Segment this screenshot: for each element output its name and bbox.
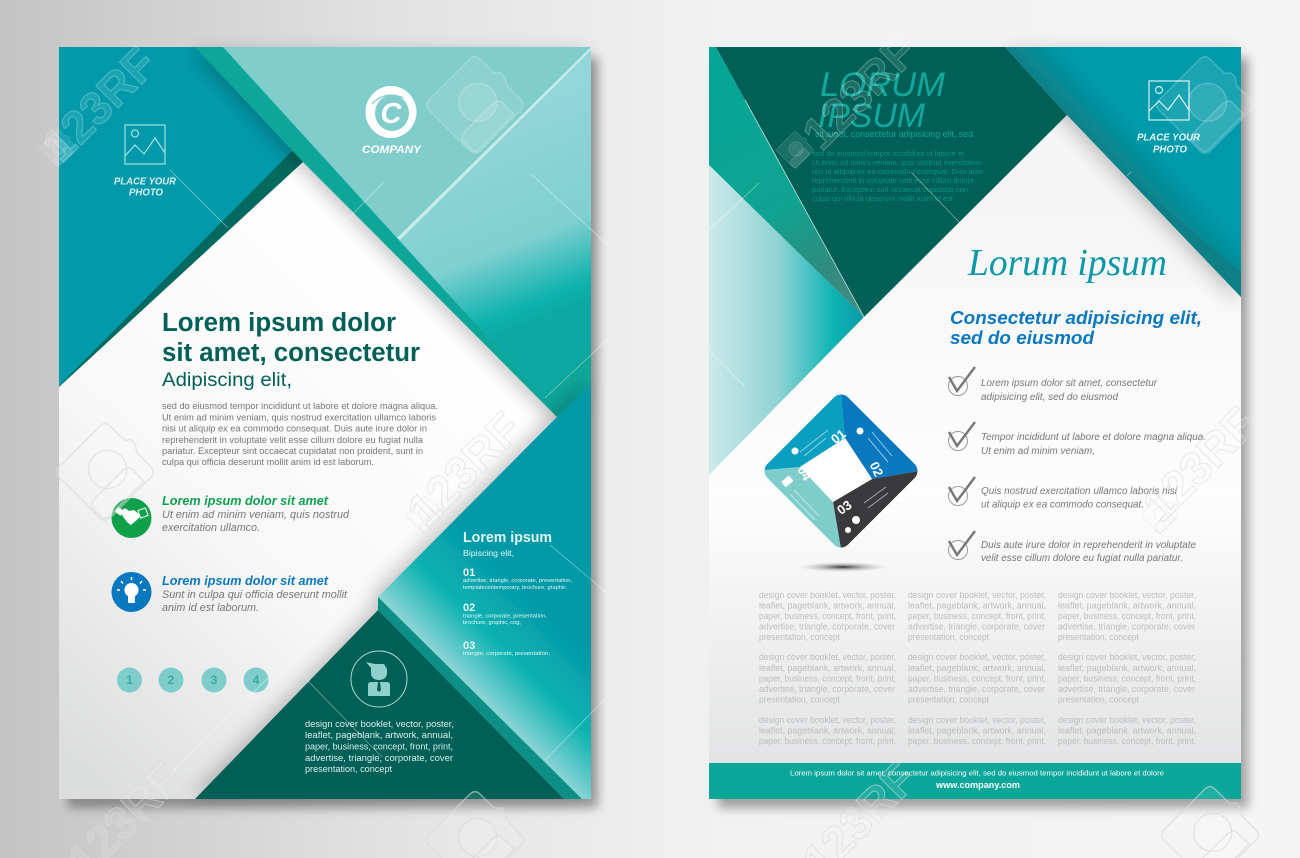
body paragraph: pariatur. Excepteur sint occaecat cupidatat non proident, sunt in — [162, 446, 423, 457]
watermark wordmarks: 123RF — [792, 25, 926, 159]
list panel text: brochure, graphic, cog, — [463, 620, 521, 626]
check item 4 — [948, 531, 1197, 564]
page number dots: 3 — [211, 673, 218, 687]
column 2: paper, business, concept, front, print, — [908, 736, 1046, 746]
list panel text: 03 — [463, 640, 475, 652]
cover paragraph: Ut enim ad minim veniam, quis nostrud exercitation — [812, 158, 982, 167]
photo caption — [1137, 132, 1200, 156]
list panel text: triangle, corporate, presentation, — [463, 651, 550, 657]
dark strip under teal panel — [59, 150, 303, 387]
column 1: presentation, concept — [759, 694, 840, 704]
cover paragraph: pariatur. Excepteur sint occaecat cupidatat non — [812, 185, 968, 194]
list panel text — [463, 530, 572, 657]
column 1: design cover booklet, vector, poster, — [759, 590, 896, 600]
dark panel text: design cover booklet, vector, poster, — [305, 719, 454, 729]
check item 2 — [948, 422, 1206, 457]
footer band — [709, 763, 1241, 799]
body paragraph: nisi ut aliquip ex ea commodo consequat. Duis aute irure dolor in — [162, 424, 427, 434]
cover title: LORUM — [820, 66, 945, 104]
footer band: Lorem ipsum dolor sit amet, consectetur adipisicing elit, sed do eiusmod tempor incididunt ut labore et dolore — [790, 768, 1164, 778]
column 3: advertise, triangle, corporate, cover — [1058, 622, 1195, 632]
item: partnership: exercitation ullamco. — [162, 522, 260, 534]
column 2: presentation, concept — [908, 632, 989, 642]
body paragraph: sed do eiusmod tempor incididunt ut labore et dolore magna aliqua. — [162, 401, 438, 412]
column 2: advertise, triangle, corporate, cover — [908, 684, 1045, 694]
cover title — [818, 66, 945, 135]
diagram shadow — [799, 562, 887, 572]
check item 1: Lorem ipsum dolor sit amet, consectetur — [981, 378, 1158, 389]
chart: diamond cycle diagram: 01 — [828, 426, 849, 447]
column 1: leaflet, pageblank, artwork, annual, — [759, 663, 896, 673]
column 3: presentation, concept — [1058, 694, 1139, 704]
column 1: advertise, triangle, corporate, cover — [759, 622, 895, 632]
logo: company — [362, 86, 423, 156]
right lower panel with list — [195, 383, 591, 799]
top left teal panel — [59, 47, 303, 386]
script title: Lorum ipsum — [967, 242, 1167, 284]
heading: Lorem ipsum dolor — [162, 309, 396, 337]
icon: place your photo — [1149, 81, 1189, 120]
check item 3 — [948, 477, 1178, 510]
column 2: presentation, concept — [908, 694, 989, 704]
list panel text: advertise, triangle, corporate, presentation, — [463, 578, 572, 584]
item: idea: Sunt in culpa qui officia deserunt mollit — [162, 589, 348, 601]
photo caption: PHOTO — [129, 188, 163, 198]
chart: diamond cycle diagram: 03 — [834, 497, 855, 518]
right upper panels — [195, 47, 591, 417]
panel: left page — [59, 47, 591, 799]
item: partnership — [162, 493, 350, 534]
column 1: presentation, concept — [759, 632, 840, 642]
column 1: leaflet, pageblank, artwork, annual, — [759, 726, 896, 736]
chart: diamond cycle diagram: 04 — [794, 463, 815, 484]
light left panel — [709, 165, 864, 475]
check item 1 — [948, 367, 1158, 403]
body paragraph: culpa qui officia deserunt mollit anim id est laborum. — [162, 457, 374, 468]
photo caption — [114, 176, 176, 198]
body paragraph — [162, 401, 438, 468]
dark panel text: presentation, concept — [305, 764, 392, 774]
column 3: advertise, triangle, corporate, cover — [1058, 684, 1195, 694]
page number dots: 2 — [168, 673, 175, 687]
list panel text: templatecontemporary, brochure, graphic — [463, 585, 567, 591]
list panel text: 01 — [463, 567, 475, 579]
dark panel text: leaflet, pageblank, artwork, annual, — [305, 730, 453, 740]
photo caption: PLACE YOUR — [1137, 132, 1200, 144]
right page base — [709, 47, 1241, 799]
check item 3: Quis nostrud exercitation ullamco laboris nisi — [981, 486, 1178, 497]
column 3: leaflet, pageblank, artwork, annual, — [1058, 663, 1196, 673]
column 3: leaflet, pageblank, artwork, annual, — [1058, 600, 1196, 610]
column 3: design cover booklet, vector, poster, — [1058, 652, 1196, 662]
column 3: paper, business, concept, front, print, — [1058, 736, 1196, 746]
page number dots — [117, 668, 268, 692]
item: partnership: Ut enim ad minim veniam, quis nostrud — [162, 509, 350, 521]
icon: light bulb — [112, 572, 152, 612]
cover title: IPSUM — [818, 97, 926, 135]
heading — [162, 309, 420, 391]
page number dots: 4 — [253, 673, 260, 687]
item: idea: anim id est laborum. — [162, 602, 259, 614]
column 2 — [908, 590, 1046, 746]
blue heading: Consectetur adipisicing elit, — [950, 307, 1202, 328]
list panel text: Lorem ipsum — [463, 530, 552, 546]
page number dots: 1 — [126, 673, 133, 687]
photo caption: PHOTO — [1153, 144, 1187, 156]
list panel text: Bipiscing elit, — [463, 548, 514, 558]
item: idea — [162, 573, 348, 614]
watermark wordmarks: 123RF — [32, 37, 166, 171]
column 1: design cover booklet, vector, poster, — [759, 652, 896, 662]
column 2: leaflet, pageblank, artwork, annual, — [908, 726, 1046, 736]
footer band: www.company.com — [935, 780, 1020, 791]
logo: company: C — [381, 98, 403, 130]
cover subtitle: sit amet, consectetur adipisicing elit, sed — [815, 129, 973, 139]
column 3: leaflet, pageblank, artwork, annual, — [1058, 726, 1196, 736]
blue heading — [950, 307, 1202, 348]
item: partnership: Lorem ipsum dolor sit amet — [162, 493, 329, 508]
cover paragraph: sed do eiusmod tempor incididunt ut labore et — [812, 149, 965, 158]
column 1: leaflet, pageblank, artwork, annual, — [759, 600, 896, 610]
column 1: advertise, triangle, corporate, cover — [759, 684, 895, 694]
icon: person — [351, 651, 407, 707]
check item 3: ut aliquip ex ea commodo consequat. — [981, 500, 1144, 510]
column 3: design cover booklet, vector, poster, — [1058, 715, 1196, 725]
list panel text: 02 — [463, 602, 475, 614]
column 2: leaflet, pageblank, artwork, annual, — [908, 600, 1046, 610]
dark panel text — [305, 719, 454, 774]
text columns — [759, 590, 1196, 746]
dark panel text: advertise, triangle, corporate, cover — [305, 753, 453, 763]
column 2: leaflet, pageblank, artwork, annual, — [908, 663, 1046, 673]
check item 4: Duis aute irure dolor in reprehenderit in voluptate — [981, 540, 1197, 551]
column 2: design cover booklet, vector, poster, — [908, 652, 1046, 662]
column 3 — [1058, 590, 1196, 746]
column 1: paper, business, concept, front, print, — [759, 611, 896, 621]
body paragraph: Ut enim ad minim veniam, quis nostrud exercitation ullamco laboris — [162, 412, 436, 424]
dark top panel — [716, 47, 1067, 317]
column 3: presentation, concept — [1058, 632, 1139, 642]
heading: sit amet, consectetur — [162, 339, 420, 367]
green left panel — [709, 47, 864, 317]
chart: diamond cycle diagram: 02 — [867, 459, 886, 479]
logo: company: COMPANY — [362, 144, 423, 156]
column 1: design cover booklet, vector, poster, — [759, 715, 896, 725]
chart: diamond cycle diagram — [764, 394, 918, 548]
top right teal panel — [1005, 47, 1241, 297]
list panel text: triangle, corporate, presentation, — [463, 614, 547, 620]
left page base — [59, 47, 591, 799]
watermark wordmarks: 123RF — [1132, 397, 1266, 531]
dark panel text: paper, business, concept, front, print, — [305, 742, 453, 752]
blue heading: sed do eiusmod — [950, 327, 1095, 348]
cover paragraph: nisi ut aliquip ex ea commodo consequat. Duis aute — [812, 167, 983, 176]
check item 1: adipisicing elit, sed do eiusmod — [981, 392, 1119, 403]
item: idea: Lorem ipsum dolor sit amet — [162, 573, 329, 588]
right page shadow — [718, 58, 1248, 808]
column 3: design cover booklet, vector, poster, — [1058, 590, 1196, 600]
check item 2: Tempor incididunt ut labore et dolore magna aliqua. — [981, 432, 1206, 443]
icon: place your photo — [125, 125, 165, 164]
diagonal hairlines — [170, 170, 1131, 773]
column 1 — [759, 590, 896, 746]
checklist — [948, 367, 1206, 564]
column 2: advertise, triangle, corporate, cover — [908, 622, 1045, 632]
column 2: design cover booklet, vector, poster, — [908, 590, 1046, 600]
photo caption: PLACE YOUR — [114, 176, 176, 188]
left page shadow — [68, 58, 598, 808]
column 3: paper, business, concept, front, print, — [1058, 611, 1196, 621]
column 1: paper, business, concept, front, print, — [759, 736, 896, 746]
column 2: paper, business, concept, front, print, — [908, 674, 1046, 684]
icon: handshake — [112, 498, 152, 538]
body paragraph: reprehenderit in voluptate velit esse cillum dolore eu fugiat nulla — [162, 435, 424, 446]
column 2: design cover booklet, vector, poster, — [908, 715, 1046, 725]
check item 2: Ut enim ad minim veniam, — [981, 446, 1095, 457]
panel: right page — [709, 47, 1241, 799]
column 2: paper, business, concept, front, print, — [908, 611, 1046, 621]
column 1: paper, business, concept, front, print, — [759, 674, 896, 684]
watermark wordmarks: 123RF — [397, 402, 531, 536]
check item 4: velit esse cillum dolore eu fugiat nulla pariatur. — [981, 553, 1183, 564]
column 3: paper, business, concept, front, print, — [1058, 674, 1196, 684]
heading: Adipiscing elit, — [162, 369, 292, 391]
cover paragraph: culpa qui officia deserunt mollit anim id est — [812, 194, 954, 203]
cover paragraph: reprehenderit in voluptate velit esse cillum dolore — [812, 176, 974, 185]
cover paragraph — [812, 149, 983, 203]
